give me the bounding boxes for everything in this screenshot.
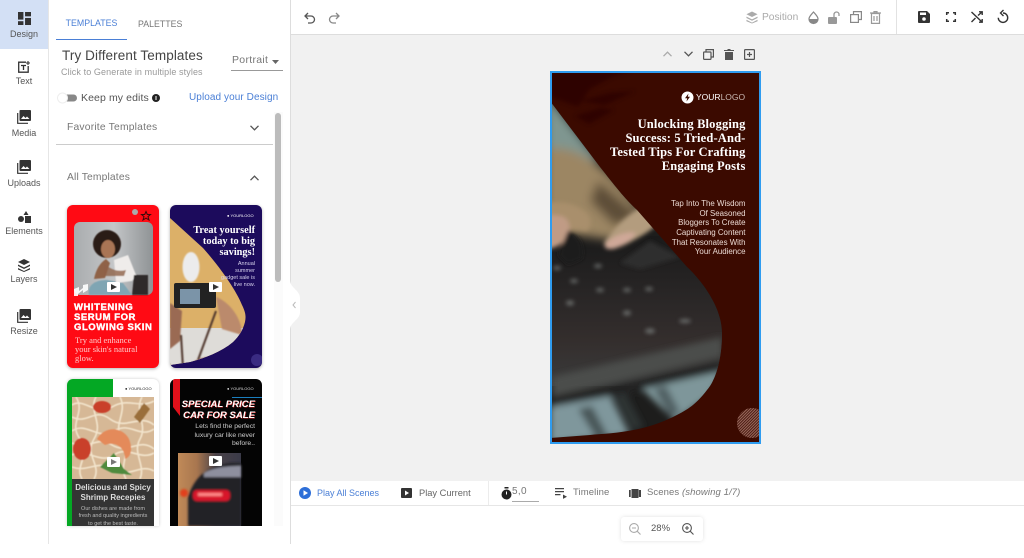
card title	[193, 225, 256, 258]
icon: unlock	[828, 11, 840, 24]
card body text: gadget sale is	[221, 275, 255, 281]
template card: treat yourself	[170, 205, 262, 368]
icon: opacity drop	[808, 11, 819, 24]
toggle label: Keep my edits	[81, 92, 149, 104]
icon: dropdown arrow	[272, 60, 279, 64]
nav item: media	[12, 110, 36, 138]
icon: move down	[684, 51, 693, 57]
poster title: Engaging Posts	[662, 159, 746, 173]
scrollbar thumb	[275, 113, 281, 282]
icon: uploads	[17, 160, 31, 174]
accordion: favorite templates	[56, 112, 273, 145]
card title	[182, 399, 255, 421]
card logo: ● YOURLOGO	[227, 213, 254, 218]
label: layers: Layers	[10, 274, 38, 284]
card title: Shrimp Recepies	[81, 493, 145, 502]
poster title: Tested Tips For Crafting	[610, 145, 746, 159]
icon: layers	[18, 259, 30, 272]
zoom value: 28%	[651, 523, 670, 534]
card body text: luxury car like never	[195, 432, 255, 438]
logo text: YOURLOGO	[696, 92, 745, 102]
poster subtitle: Tap Into The Wisdom	[671, 199, 746, 208]
panel: left navigation sidebar	[0, 0, 49, 544]
label: design: Design	[10, 29, 38, 39]
card play button	[209, 282, 222, 292]
label: text: Text	[16, 76, 32, 86]
poster subtitle: That Resonates With	[672, 238, 746, 247]
scene controls	[660, 48, 760, 62]
zoom control	[621, 517, 703, 541]
panel: top toolbar	[291, 0, 1024, 35]
icon: duplicate	[850, 11, 862, 23]
panel: playback bar	[291, 481, 1024, 506]
poster photo: hand on keyboard	[552, 73, 759, 438]
card photo	[74, 222, 153, 296]
label: play current: Play Current	[419, 488, 471, 498]
label: position: Position	[762, 12, 798, 23]
icon: fullscreen	[946, 12, 956, 22]
card red accent	[173, 379, 180, 416]
poster: selected scene	[550, 71, 761, 444]
icon: delete scene	[724, 49, 734, 60]
poster hatched circle decoration	[737, 408, 767, 438]
panel: canvas area background	[291, 35, 1024, 481]
label: timeline: Timeline	[573, 487, 609, 498]
nav item: text	[16, 61, 32, 86]
card title: today to big	[203, 236, 255, 247]
nav item: elements	[5, 211, 43, 236]
card dark caption panel	[72, 479, 154, 526]
icon: zoom out	[629, 523, 641, 535]
card body text: Our dishes are made from	[81, 506, 145, 512]
toggle: keep my edits	[57, 92, 160, 104]
icon: delete	[870, 11, 881, 24]
link: upload your design: Upload your Design	[189, 92, 278, 103]
poster logo	[681, 91, 747, 105]
label: resize: Resize	[10, 326, 38, 336]
accordion: all templates	[67, 172, 259, 183]
card body text: fresh and quality ingredients	[79, 513, 147, 519]
accordion label: All Templates	[67, 172, 130, 183]
icon: position layers	[746, 12, 758, 24]
accordion label: Favorite Templates	[67, 122, 157, 133]
card title: SPECIAL PRICE	[182, 399, 255, 410]
card title: CAR FOR SALE	[183, 410, 255, 421]
icon: timer	[501, 487, 512, 500]
icon: resize	[17, 309, 31, 323]
card body text	[75, 335, 138, 363]
card play button	[107, 282, 120, 292]
nav item: layers	[10, 259, 38, 284]
poster selection border	[550, 71, 761, 444]
card body text: live now.	[234, 282, 255, 288]
icon: duplicate scene	[703, 49, 714, 60]
template card: whitening serum	[67, 205, 159, 368]
panel collapse handle	[290, 280, 301, 330]
heading: try different templates: Try Different Templates	[62, 48, 203, 63]
icon: text	[18, 61, 30, 73]
card body text: summer	[235, 268, 255, 274]
card play button	[107, 457, 120, 467]
card photo	[178, 453, 241, 526]
icon: play all	[299, 487, 311, 499]
card title	[75, 483, 151, 502]
label: elements: Elements	[5, 226, 43, 236]
divider	[488, 481, 489, 505]
card title: Delicious and Spicy	[75, 483, 151, 492]
card logo: ● YOURLOGO	[125, 386, 152, 391]
icon: elements	[18, 211, 31, 223]
input: duration: 5,0	[512, 486, 527, 497]
template card: shrimp recipes	[67, 379, 159, 526]
card title: SERUM FOR	[74, 312, 136, 323]
card decorative stripes	[74, 284, 88, 296]
poster title: Unlocking Blogging	[638, 117, 746, 131]
divider	[896, 0, 897, 34]
card body text: your skin's natural	[75, 344, 137, 354]
card body text: before..	[232, 440, 255, 447]
icon: shuffle	[971, 11, 983, 23]
icon: media	[17, 110, 31, 124]
card badge: grey dot	[132, 209, 138, 215]
card body text	[221, 261, 255, 288]
card accent line	[232, 397, 262, 398]
icon: play current	[401, 488, 412, 498]
card photo	[170, 218, 262, 366]
template card: special price car	[170, 379, 262, 526]
card body text: Lets find the perfect	[195, 423, 255, 430]
card body text: Try and enhance	[75, 335, 131, 345]
card logo: ● YOURLOGO	[227, 386, 254, 391]
icon: design grid	[18, 12, 31, 25]
card title: Treat yourself	[193, 225, 255, 236]
card title: savings!	[220, 247, 255, 258]
nav item: design	[0, 0, 48, 49]
poster title	[610, 117, 746, 173]
logo icon	[681, 91, 694, 104]
card title: GLOWING SKIN	[74, 322, 152, 333]
input: duration	[512, 485, 539, 502]
poster subtitle: Your Audience	[695, 247, 746, 256]
poster subtitle	[671, 199, 746, 257]
icon: info	[152, 94, 160, 102]
icon: favourite star	[140, 210, 152, 221]
card green block	[67, 379, 113, 526]
card title	[74, 302, 152, 333]
card body text	[195, 423, 255, 448]
card body text	[78, 506, 148, 526]
card title: WHITENING	[74, 302, 133, 313]
poster subtitle: Of Seasoned	[699, 209, 746, 218]
icon: save	[918, 11, 930, 23]
tab: templates active	[56, 0, 127, 40]
card body text: Annual	[238, 261, 255, 267]
icon: timeline	[555, 488, 567, 499]
subheading: Click to Generate in multiple styles	[61, 67, 203, 77]
icon: scenes	[629, 489, 641, 498]
poster title: Success: 5 Tried-And-	[625, 131, 746, 145]
nav item: uploads	[7, 160, 41, 188]
icon: add scene	[744, 49, 755, 60]
panel: templates side panel	[49, 0, 291, 544]
scrollbar track	[274, 112, 283, 526]
poster subtitle: Captivating Content	[676, 228, 746, 237]
icon: undo and redo	[304, 12, 340, 24]
tab: templates active: TEMPLATES	[66, 18, 117, 28]
poster shadow leaf decoration	[550, 71, 635, 124]
toggle switch	[57, 92, 77, 104]
poster subtitle: Bloggers To Create	[678, 218, 746, 227]
dropdown value: Portrait	[232, 54, 268, 66]
label: play all scenes: Play All Scenes	[317, 488, 379, 498]
label: media: Media	[12, 128, 36, 138]
icon: zoom in	[682, 523, 694, 535]
label: scenes: Scenes (showing 1/7)	[647, 487, 740, 498]
card photo	[72, 397, 154, 479]
card body text: glow.	[75, 353, 94, 363]
dropdown: portrait	[231, 52, 283, 71]
label: uploads: Uploads	[7, 178, 41, 188]
icon: move up	[663, 51, 672, 57]
icon: chevron down	[250, 125, 259, 131]
icon: chevron up	[250, 175, 259, 181]
nav item: resize	[10, 309, 38, 336]
card play button	[209, 456, 222, 466]
tab: palettes: PALETTES	[138, 19, 182, 29]
icon: reset	[998, 10, 1008, 24]
